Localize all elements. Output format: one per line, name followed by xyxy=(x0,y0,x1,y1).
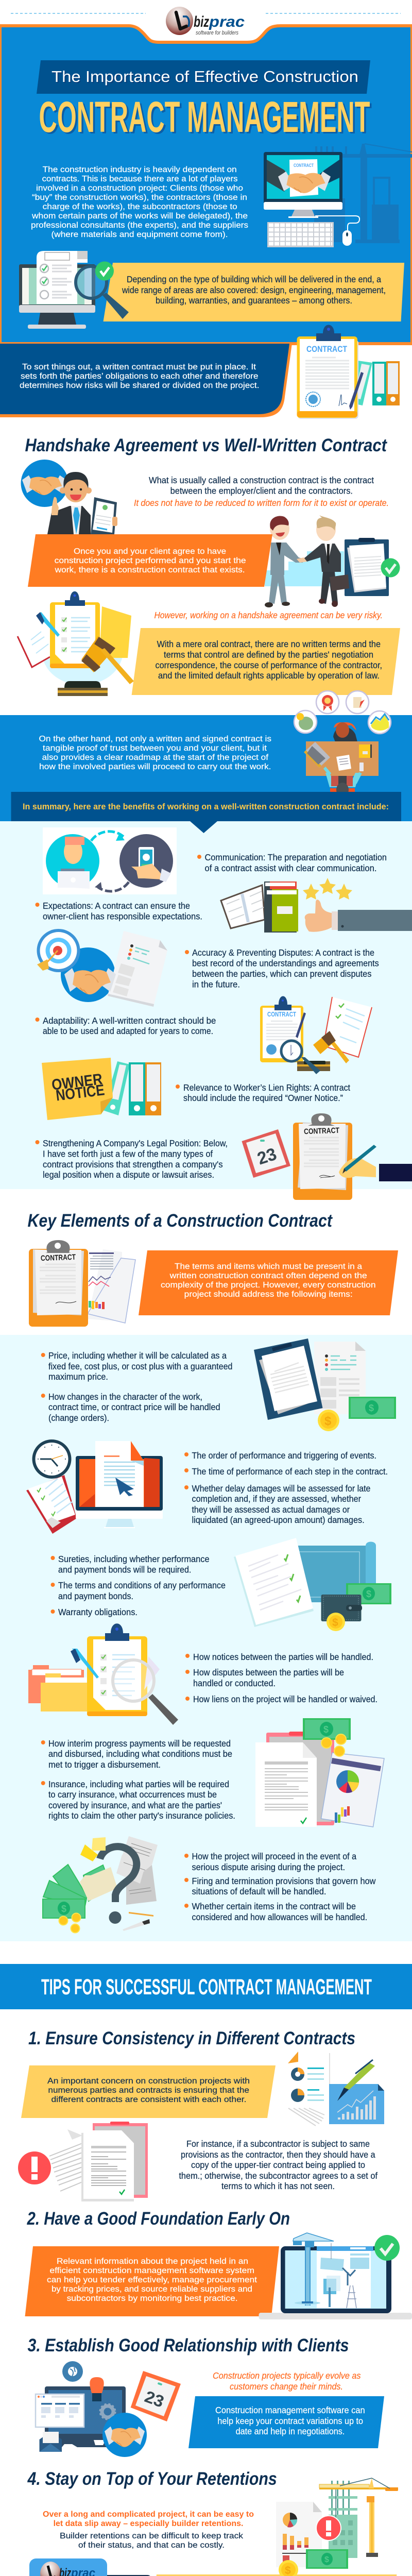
illustration: question mark money and papers xyxy=(43,1836,158,1933)
panel: once you and your client agree: construction project performed and you start the xyxy=(55,556,246,565)
bullets: price and changes: (change orders). xyxy=(48,1413,109,1423)
bullet: accuracy and preventing disputes xyxy=(185,947,379,989)
text: for instance subcontractor xyxy=(179,2139,377,2191)
bullet: accuracy and preventing disputes: best record of the understandings and agreements xyxy=(192,958,379,969)
illustration: calendar with signed orange clipboard: 23 xyxy=(255,1144,279,1168)
illustration: clock checklist and monitor xyxy=(26,1439,163,1534)
icon: coin xyxy=(279,2560,298,2576)
bullets: sureties terms warranty: Warranty obligations. xyxy=(58,1607,138,1617)
bullet: accuracy and preventing disputes: Accuracy & Preventing Disputes: A contract is the xyxy=(192,947,374,958)
illustration: monitor bulb calendar and handshake: 23 xyxy=(142,2387,166,2411)
text: intro paragraph xyxy=(31,165,248,239)
panel: important concern: An important concern on construction projects with xyxy=(47,2077,250,2086)
text: on the other hand: On the other hand, not only a written and signed contract is xyxy=(39,735,271,743)
panel: once you and your client agree: work, there is a construction contract that exists. xyxy=(54,566,245,574)
text: however working on a handshake agreement: However, working on a handshake agreement can be very risky. xyxy=(154,610,383,620)
panel: relevant information: Relevant information about the project held in an xyxy=(57,2257,248,2266)
illustration: owner notice sticky note and binders xyxy=(42,1058,161,1120)
callout: mere oral contract xyxy=(132,628,400,695)
panel: construction management software can help xyxy=(188,2396,384,2448)
title banner xyxy=(37,60,370,94)
illustration: blueprint checklist wallet: $ xyxy=(332,1617,338,1629)
panel: light key elements section xyxy=(0,1335,412,1941)
text: intro paragraph: involved in a construction project: Clients (those who xyxy=(36,184,243,193)
panel: terms and items: The terms and items which must be present in a xyxy=(175,1262,362,1271)
bullets: order time and delay damages: Whether delay damages will be assessed for late xyxy=(192,1483,370,1494)
icon: magnifier handle and badge over callout xyxy=(95,262,129,319)
illustration: report charts and pen xyxy=(288,2052,384,2126)
illustration: crane building report warning: $ xyxy=(324,2555,329,2564)
text: intro paragraph: The construction industry is heavily dependent on xyxy=(43,165,237,174)
illustration: target handshake and document xyxy=(37,929,167,1007)
illustration: faint crane and building background xyxy=(314,144,412,243)
decorative dotted line left xyxy=(11,13,146,14)
bullets: interim payments and insurance: covered by insurance, and what are the parties' xyxy=(48,1800,222,1810)
bullets: order time and delay damages: The time of performance of each step in the contract. xyxy=(192,1466,388,1477)
illustration: monitor with handshake and contract: CONTRACT xyxy=(294,163,314,168)
bullets: order time and delay damages xyxy=(184,1450,388,1525)
bullets: notices disputes liens: How notices between the parties will be handled. xyxy=(193,1652,373,1662)
bullets: price and changes: contract time, or contract price will be handled xyxy=(48,1402,220,1412)
panel: written contract dark band: sets forth the parties’ obligations to each other and therefore xyxy=(21,372,259,381)
panel: relevant information: subcontractors by monitoring best practice. xyxy=(67,2294,238,2303)
illustration: laptop with charts and bizprac badge xyxy=(20,2558,175,2576)
panel: once you and your client agree: Once you and your client agree to have xyxy=(74,547,226,556)
heading: 3. establish good relationship: 3. Establish Good Relationship with Clients xyxy=(28,2335,349,2355)
bullets: notices disputes liens: How disputes between the parties will be xyxy=(193,1667,344,1677)
logo: bizprac header xyxy=(166,7,245,36)
illustration: monitor bulb calendar and handshake xyxy=(36,2361,181,2457)
bullets: price and changes: Price, including whether it will be calculated as a xyxy=(48,1350,227,1361)
panel: terms and items: complexity of the project. However, every construction xyxy=(161,1281,376,1290)
bullets: interim payments and insurance: met to trigger a disbursement. xyxy=(48,1759,161,1770)
illustration: money documents and pie report xyxy=(255,1718,384,1827)
bullets: dispute termination allowances: situations of default will be handled. xyxy=(192,1886,327,1896)
bullets: sureties terms warranty: Sureties, including whether performance xyxy=(58,1554,210,1564)
illustration: icon circles above meeting desk xyxy=(294,691,391,734)
bullets: dispute termination allowances xyxy=(184,1851,376,1922)
bullet: strengthening legal position: I have set forth just a few of the many types of xyxy=(43,1149,213,1159)
logo: bizprac header: prac xyxy=(209,13,245,30)
panel: construction management software can help: date and help in negotiations. xyxy=(236,2426,345,2436)
panel: relevant information: can help you tender effectively, manage procurement xyxy=(47,2276,258,2284)
illustration: crane building report warning xyxy=(276,2478,398,2569)
callout: depending on type of building xyxy=(103,263,404,321)
bullets: dispute termination allowances: serious dispute arising during the project. xyxy=(192,1862,345,1872)
bullets: interim payments and insurance: to carry insurance, what occurrences must be xyxy=(48,1789,217,1800)
text: over a long and complicated project: of their status, and that can be costly. xyxy=(78,2541,225,2550)
heading: 4. stay on top: 4. Stay on Top of Your Retentions xyxy=(27,2469,277,2489)
bullets: interim payments and insurance: and disbursed, including what conditions must be xyxy=(48,1749,232,1759)
bullet: relevance to worker's lien rights: Relevance to Worker’s Lien Rights: A contract xyxy=(183,1082,350,1093)
illustration: contract clipboard magnifier and gavel xyxy=(260,996,372,1074)
text: for instance subcontractor: For instance, if a subcontractor is subject to same xyxy=(186,2139,370,2149)
illustration: monitor with handshake and contract xyxy=(264,152,359,247)
text: construction projects typically evolve: customers change their minds. xyxy=(230,2381,343,2392)
text: construction projects typically evolve xyxy=(213,2370,361,2392)
bullet: communication: of a contract assist with clear communication. xyxy=(205,863,377,873)
panel: written contract dark band: To sort things out, a written contract must be put in place. It xyxy=(22,363,256,371)
text: on the other hand: how the involved parties will proceed to carry out the work. xyxy=(39,762,271,771)
bullet: strengthening legal position xyxy=(35,1138,228,1180)
bullet: adaptability xyxy=(35,1015,216,1036)
illustration: person at bottom of desk xyxy=(325,773,359,797)
illustration: calendar with signed orange clipboard xyxy=(242,1113,412,1200)
panel: relevant information: efficient construction management software system xyxy=(49,2266,254,2275)
bullet: accuracy and preventing disputes: between the parties, which can prevent disputes xyxy=(192,969,372,979)
bullets: order time and delay damages: they will be assessed as actual damages or xyxy=(192,1504,350,1515)
callout: mere oral contract: terms that control are defined by the parties' negotiation xyxy=(164,649,373,659)
text: on the other hand: also provides a clear roadmap at the start of the project of xyxy=(42,753,269,762)
panel: blue written contract section xyxy=(0,715,412,821)
panel: summary banner: In summary, here are the benefits of working on a well-written construction contract include: xyxy=(23,802,389,811)
bullets: sureties terms warranty: and payment bonds. xyxy=(58,1591,133,1601)
illustration: clipboard with folders and magnifier xyxy=(28,1623,178,1725)
title banner: The Importance of Effective Construction xyxy=(53,69,359,87)
bullet: expectations xyxy=(35,901,202,921)
text: intro paragraph: charge of the works), the subcontractors (those to xyxy=(43,202,237,211)
heading: 1. ensure consistency: 1. Ensure Consistency in Different Contracts xyxy=(28,2028,355,2048)
panel: once again good software xyxy=(148,2574,397,2576)
logo: bizprac header: software for builders xyxy=(196,30,238,36)
illustration: contract clipboard with binders: CONTRACT xyxy=(306,344,347,354)
text: what is usually called a construction contract: It does not have to be reduced to written form for it to exist or operate. xyxy=(134,498,389,508)
illustration: blueprint checklist wallet xyxy=(234,1538,391,1631)
bullets: sureties terms warranty xyxy=(50,1554,226,1617)
panel: important concern: different contracts are consistent with each other. xyxy=(52,2095,246,2104)
bullets: price and changes: maximum price. xyxy=(48,1371,108,1382)
text: on the other hand: tangible proof of trust between you and your client, but it xyxy=(43,744,267,753)
illustration: laptop with crane and workers xyxy=(259,2233,412,2319)
illustration: owner notice sticky note and binders: OWNER xyxy=(50,1071,104,1094)
bullets: sureties terms warranty: The terms and conditions of any performance xyxy=(58,1580,226,1590)
illustration: contract clipboard with report documents: CONTRACT xyxy=(41,1253,76,1263)
text: what is usually called a construction contract xyxy=(134,475,389,508)
bullets: order time and delay damages: The order of performance and triggering of events. xyxy=(192,1450,376,1461)
bullet: strengthening legal position: legal position when a dispute or lawsuit arises. xyxy=(43,1170,214,1180)
text: intro paragraph: “buy” the construction works), the contractors (those in xyxy=(32,193,247,202)
panel: important concern xyxy=(21,2065,276,2118)
text: over a long and complicated project: Over a long and complicated project, it can be easy to xyxy=(43,2510,254,2519)
heading: key elements of a construction contract: Key Elements of a Construction Contract xyxy=(28,1211,333,1231)
text: intro paragraph: contracts. This is because there are a lot of players xyxy=(42,175,238,183)
illustration: communication image xyxy=(43,827,177,894)
panel: construction management software can help: Construction management software can xyxy=(215,2405,365,2415)
callout: mere oral contract: With a mere oral contract, there are no written terms and the xyxy=(157,639,381,649)
text: for instance subcontractor: provisions as the contractor, then they should have a xyxy=(181,2149,375,2160)
bullets: price and changes: fixed fee, cost plus, or cost plus with a guaranteed xyxy=(48,1361,233,1371)
bullets: price and changes xyxy=(41,1350,232,1423)
text: intro paragraph: whom certain parts of the works will be delegated), the xyxy=(31,212,248,221)
bullet: communication xyxy=(197,852,387,873)
panel: relevant information: by tracking prices, and source reliable suppliers and xyxy=(52,2285,252,2294)
illustration: blueprint checklist wallet: $ xyxy=(366,1589,371,1599)
panel: terms and items: written construction contract often depend on the xyxy=(169,1272,367,1280)
logo: bizprac header: biz xyxy=(194,13,209,30)
illustration: clipboard document bill and coin: $ xyxy=(369,1403,374,1413)
text: for instance subcontractor: terms to which it has not seen. xyxy=(221,2181,335,2191)
text: over a long and complicated project: Builder retentions can be difficult to keep track xyxy=(60,2532,243,2540)
text: for instance subcontractor: copy of the upper-tier contract being applied to xyxy=(191,2160,365,2170)
panel: written contract dark band: determines how risks will be shared or divided on the project. xyxy=(20,381,260,390)
panel: relevant information xyxy=(25,2246,279,2316)
panel: written contract dark band xyxy=(0,344,292,417)
callout: depending on type of building: building, warranties, and guarantees – among others. xyxy=(156,295,352,306)
bullet: accuracy and preventing disputes: in the future. xyxy=(192,979,240,989)
illustration: contract clipboard with binders xyxy=(297,325,400,419)
bullets: notices disputes liens: handled or conducted. xyxy=(193,1678,276,1688)
background: header blue panel xyxy=(0,26,412,344)
panel: important concern: numerous parties and contracts is ensuring that the xyxy=(48,2086,249,2095)
illustration: calendar with signed orange clipboard: CONTRACT xyxy=(304,1126,339,1136)
decorative dotted line right xyxy=(266,13,401,14)
icon: gavel handle over callout xyxy=(100,648,134,684)
illustration: clipboard document bill and coin: $ xyxy=(324,1414,332,1428)
text: on the other hand xyxy=(39,735,271,771)
illustration: contract clipboard with report documents xyxy=(29,1240,135,1327)
bullets: order time and delay damages: liquidated (an agreed-upon amount) damages. xyxy=(192,1515,365,1525)
bullets: dispute termination allowances: How the project will proceed in the event of a xyxy=(192,1851,356,1861)
panel: light benefits section xyxy=(0,821,412,1189)
callout: depending on type of building: Depending on the type of building which will be delivered in the end, a xyxy=(127,274,381,284)
bullet: communication: Communication: The preparation and negotiation xyxy=(205,852,387,862)
bullet: expectations: owner-client has responsible expectations. xyxy=(43,911,202,921)
bullet: relevance to worker's lien rights: should include the required “Owner Notice.” xyxy=(183,1093,343,1103)
text: construction projects typically evolve: Construction projects typically evolve as xyxy=(213,2370,361,2381)
panel: once you and your client agree xyxy=(28,534,272,587)
illustration: money documents and pie report: $ xyxy=(323,1724,329,1735)
illustration: businessman with handshake bubble xyxy=(21,460,117,534)
text: over a long and complicated project: let data slip away – especially builder retentions. xyxy=(54,2519,243,2528)
text: over a long and complicated project xyxy=(43,2510,254,2550)
panel: terms and items xyxy=(139,1250,398,1315)
bullet: relevance to worker's lien rights xyxy=(176,1082,350,1103)
bullets: dispute termination allowances: Whether certain items in the contract will be xyxy=(192,1901,356,1911)
bullets: notices disputes liens: How liens on the project will be handled or waived. xyxy=(193,1694,377,1704)
illustration: two men shaking hands with contract board xyxy=(265,515,400,607)
bullets: dispute termination allowances: considered and how allowances will be handled. xyxy=(192,1912,367,1922)
illustration: clipboard document bill and coin xyxy=(254,1338,396,1431)
illustration: books stars and thumbs up xyxy=(221,878,412,933)
bullets: interim payments and insurance: Insurance, including what parties will be required xyxy=(48,1779,229,1789)
panel: summary banner xyxy=(11,792,401,833)
text: intro paragraph: professional consultants (the experts), and the suppliers xyxy=(31,221,248,230)
text: what is usually called a construction contract: What is usually called a construction contract is the contract xyxy=(149,475,374,485)
bullets: order time and delay damages: completion and, if they are assessed, whether xyxy=(192,1494,361,1504)
illustration: clipboard with gavel xyxy=(18,591,131,696)
bullets: price and changes: How changes in the character of the work, xyxy=(48,1392,202,1402)
bullet: strengthening legal position: Strengthening A Company's Legal Position: Below, xyxy=(43,1138,228,1148)
panel: terms and items: project should address the following items: xyxy=(184,1290,353,1299)
banner: tips for successful contract management xyxy=(0,1964,412,2009)
bullets: notices disputes liens xyxy=(185,1652,377,1704)
illustration: contract clipboard magnifier and gavel: CONTRACT xyxy=(267,1010,296,1018)
illustration: owner notice sticky note and binders: NOTICE xyxy=(55,1081,106,1105)
text: intro paragraph: (where materials and equipment come from). xyxy=(52,230,228,239)
callout: mere oral contract: correspondence, the course of performance of the contractor, xyxy=(156,660,382,670)
bullet: adaptability: Adaptability: A well-written contract should be xyxy=(43,1015,216,1026)
illustration: two people meeting at desk from above xyxy=(304,722,379,783)
callout: mere oral contract: and the limited default rights applicable by operation of law. xyxy=(158,670,380,681)
bullet: expectations: Expectations: A contract can ensure the xyxy=(43,901,190,911)
panel: construction management software can help: help keep your contract variations up to xyxy=(217,2416,363,2426)
text: what is usually called a construction contract: between the employer/client and the contractors. xyxy=(170,485,353,496)
bullet: strengthening legal position: contract provisions that strengthen a company's xyxy=(43,1159,223,1170)
callout: depending on type of building: wide range of areas are also covered: design, engineering, management, xyxy=(122,285,386,295)
bullet: adaptability: able to be used and adapted for years to come. xyxy=(43,1026,213,1036)
bullets: interim payments and insurance: rights to claim the other party's insurance policies. xyxy=(48,1810,235,1821)
heading: 2. have a good foundation: 2. Have a Good Foundation Early On xyxy=(27,2209,290,2229)
illustration: question mark money and papers: $ xyxy=(61,1904,66,1914)
bullets: interim payments and insurance: How interim progress payments will be requested xyxy=(48,1738,231,1749)
bullets: sureties terms warranty: and payment bonds will be required. xyxy=(58,1564,191,1574)
bullets: dispute termination allowances: Firing and termination provisions that govern how xyxy=(192,1876,376,1886)
illustration: monitor with checklist and magnifier xyxy=(19,251,114,329)
text: for instance subcontractor: them.; otherwise, the subcontractor agrees to a set of xyxy=(179,2171,377,2181)
illustration: pink clipboard with warning xyxy=(18,2122,148,2201)
bullets: interim payments and insurance xyxy=(41,1738,235,1821)
title banner: The Importance of Effective Construction xyxy=(52,67,358,86)
